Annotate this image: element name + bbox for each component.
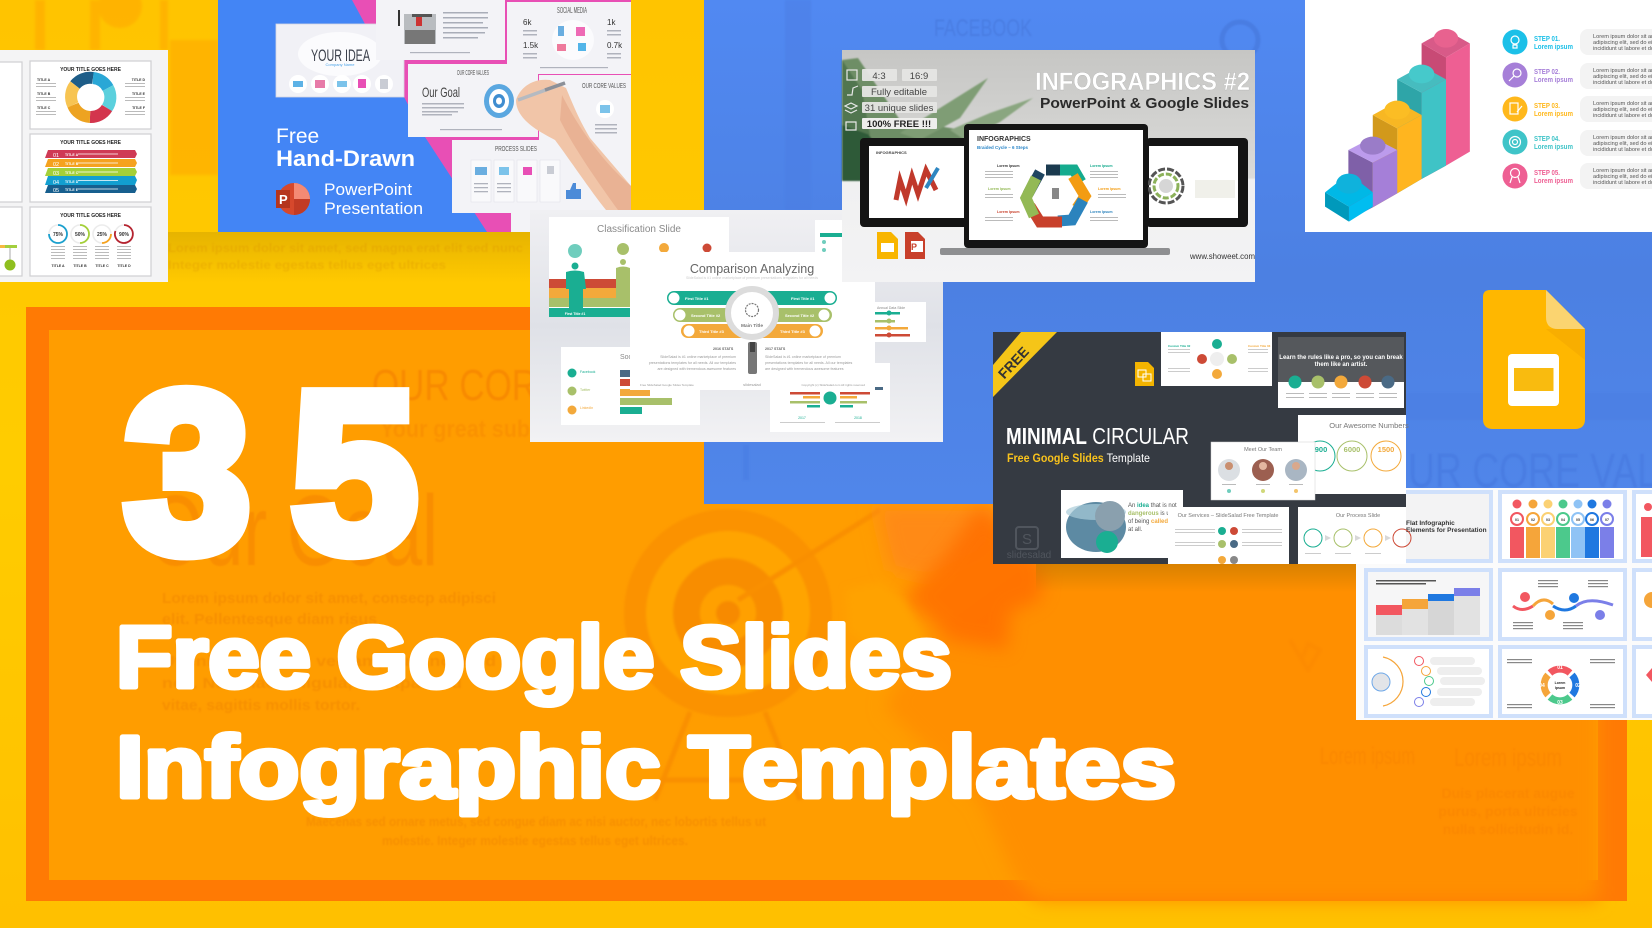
slide: seven columns: 06 [1590,518,1594,522]
faded background text on orange [148,361,1578,848]
slide: classification: First Title #1 [565,312,585,316]
panel background [842,50,1255,282]
card: stacked ribbons: 02 [53,162,59,168]
slide: four segment ring [1498,645,1627,718]
card: stacked ribbons: TITLE E [65,188,79,192]
slide: right chart: 2018 [854,416,862,420]
slide: your idea [276,24,404,97]
slide: top right small [815,220,842,252]
chart: isometric lego bars [1325,29,1470,222]
faded lorem text on yellow band: Integer molestie egestas tellus eget ultrices [168,258,446,272]
slide: process slides [452,140,631,213]
step labels: STEP 02. [1534,67,1560,76]
card: percentage rings: 75% [53,232,64,238]
left column partial cards [0,62,22,276]
slide: social media: SOCIAL MEDIA [557,6,587,15]
laptop: Lorem Ipsum [1098,187,1121,191]
slide: circle diagram: Custom Title 03 [1248,344,1271,348]
step descriptions [1580,29,1652,189]
slide: your idea: YOUR IDEA [311,46,370,65]
slide: stair blocks [1364,568,1493,641]
slide: idea with circles: of being called an i [1128,519,1179,525]
card: percentage rings: TITLE D [117,264,131,268]
faded lorem text on yellow band [168,241,523,272]
hand shapes [875,505,1000,580]
slide: core values right [539,75,631,150]
slide: social media: 0.7k [607,41,623,50]
ribbon: free [993,332,1057,397]
icon: google slides small [877,232,898,259]
slide: our goal: Our Goal [422,84,460,100]
panel background [993,332,1406,564]
card: circular arrows: YOUR TITLE GOES HERE [60,67,122,73]
ribbon: free: FREE [995,343,1032,382]
heading: free hand-drawn: Hand-Drawn [276,146,415,171]
faded background text on orange: Your great sub [380,416,530,443]
card: stacked ribbons: TITLE C [65,171,79,175]
slide: awesome numbers: 6000 [1344,445,1360,454]
slide: idea with circles [1061,490,1183,558]
step labels: STEP 04. [1534,134,1560,143]
card: percentage rings: 90% [119,232,130,238]
comparison stats text: presentations templates for all needs. All our templates [649,361,736,365]
slide: title: Elements for Presentation [1406,527,1487,534]
slide: partial right multicolor [1632,568,1652,641]
background: blue block [704,0,1652,504]
faded background text on orange: Lorem ipsum dolor sit amet, consecp adipisci [162,590,496,607]
step labels: Lorem ipsum [1534,109,1573,118]
faded background text on orange: OUR COR [372,361,537,410]
slide: social media bars: Twitter [580,388,591,392]
panel background [0,50,168,282]
comparison pills: First Title #1 [791,296,815,301]
slide: seven columns: 04 [1561,518,1565,522]
slide: classification: Classification Slide [597,224,681,235]
slide: our services: Our Services – SlideSalad Free Template [1178,513,1278,519]
number: 35: 3 [124,346,251,600]
card: stacked ribbons: 05 [53,188,59,194]
card: stacked ribbons: TITLE B [65,162,79,166]
icon: powerpoint small: P [911,242,917,252]
laptop: Lorem Ipsum [1090,164,1113,168]
icon: powerpoint small [905,232,925,259]
step labels: Lorem ipsum [1534,42,1573,51]
heading: free hand-drawn [276,125,415,171]
slide: social media: 1.5k [523,41,539,50]
laptop: Lorem Ipsum [988,187,1011,191]
slide: title: Flat Infographic [1406,520,1455,527]
card: circular arrows: TITLE F [132,106,146,110]
slide: right chart: 2017 [798,416,806,420]
slide: circle diagram [1161,332,1272,386]
slide: our process [1298,507,1411,564]
laptop: Lorem Ipsum [1090,210,1113,214]
heading: minimal circular: MINIMAL CIRCULAR [1006,423,1189,449]
panel background blue [218,0,631,232]
panel background [1356,488,1652,720]
slide: our goal [408,64,538,137]
slide: classification [549,217,729,317]
slide: our services [1168,507,1289,564]
faded background text on orange: nec. Nulla lacus ligula, volutpat sed [162,675,462,692]
comparison pills: Third Title #3 [699,329,725,334]
slide: four segment ring: Ipsum [1555,686,1565,690]
slide: idea with circles: An idea that is not [1128,503,1177,509]
comparison stats text: are designed with tremendous awesome features [657,367,736,371]
card: percentage rings: 25% [97,232,108,238]
tablet: left [860,138,968,227]
slide: our process: Our Process Slide [1336,513,1380,519]
title: free google slides infographic templates: Free Google Slides [116,609,952,706]
faded background illustration: target and hand [624,505,1628,901]
icon: Google Slides large [1483,290,1585,429]
faded background text on orange: vitae, sagittis mollis tortor. [162,697,360,714]
faded background text on orange: Maecenas sed ornare metus, sed congue diam ac nisi auctor, nec lobortis tellus ut [306,814,767,829]
card: percentage rings: TITLE B [73,264,87,268]
slide: comparison main card: SlideSalad is #1 online marketplace of premium presentations templates for all needs [686,276,818,280]
slide: awesome numbers: Our Awesome Numbers [1329,421,1409,430]
laptop [940,124,1170,255]
laptop: Braided Cycle – 6 Steps [977,145,1029,150]
card: stacked ribbons: YOUR TITLE GOES HERE [60,140,122,146]
tags: 100% FREE !!! [867,119,931,130]
slide: annual data [875,302,926,342]
faded background text on orange: Lorem ipsum [1320,743,1415,770]
logo: slidesalad: slidesalad [1007,550,1051,561]
icon: PowerPoint: P [279,192,288,207]
slide: quote with icons: Learn the rules like a pro, so you can break [1279,355,1403,361]
panel: infographics 2 template [842,50,1255,282]
step labels: STEP 03. [1534,101,1560,110]
slide: four segment ring: 04 [1539,683,1545,689]
shadow under minimal circular panel [1036,564,1628,592]
slide: idea with circles: dangerous is unwo [1128,511,1181,517]
comparison pills: Third Title #3 [780,329,806,334]
step labels: STEP 01. [1534,34,1560,43]
panel: hand-drawn PowerPoint template [218,0,631,232]
card: stacked ribbons: 04 [53,180,59,186]
background: faded top-left illustration [35,0,218,175]
tablet: right [1146,138,1248,227]
heading: free hand-drawn: Free [276,125,319,148]
faded background text on orange: molestie. Integer molestie egestas tellus eget ultrices. [382,833,688,848]
tags [845,69,937,130]
slide: seven columns: 01 [1515,518,1519,522]
logo: slidesalad: S [1022,531,1032,548]
card: percentage rings: TITLE A [51,264,65,268]
tags: 31 unique slides [865,103,934,114]
shadow band under hand-drawn panel [150,232,540,282]
slide: social media: 6k [523,18,532,27]
slide: social media bars [561,347,700,425]
slide: quote with icons [1278,337,1404,408]
card: circular arrows: TITLE A [37,78,51,82]
slide: seven columns: 02 [1531,518,1535,522]
comparison pills: Second Title #2 [785,313,815,318]
slide: meet our team: Meet Our Team [1244,447,1282,453]
comparison stats text: 2016 STATS [713,347,734,351]
comparison stats text: SlideSalad is #1 online marketplace of premium [765,355,841,359]
subheading: powerpoint and google slides: PowerPoint & Google Slides [1040,95,1249,112]
card: percentage rings: TITLE C [95,264,109,268]
partial card details [0,245,17,270]
faded background text on orange: purus, porta ultricies [1438,803,1578,819]
slide: awesome numbers: 1500 [1378,445,1394,454]
step icons [1502,30,1528,188]
background: orange frame [26,307,1627,901]
target rings [624,509,880,800]
card: percentage rings [30,207,151,276]
comparison stats text: Free SlideSalad Google Slides Template [640,383,694,387]
slide: right chart [770,363,890,432]
slide: social media [507,2,631,74]
card: stacked ribbons: TITLE D [65,180,79,184]
comparison stats text [640,347,865,387]
text: PowerPoint Presentation: Presentation [324,199,423,218]
slide: photo [376,0,505,60]
slide: idea with circles: at all. [1128,527,1143,533]
slide: quote with icons: them like an artist. [1315,362,1368,368]
slide: four segment ring: Lorem [1555,681,1565,685]
step labels: STEP 05. [1534,168,1560,177]
slide: awesome numbers [1298,415,1409,494]
card: circular arrows: TITLE E [132,92,146,96]
card: circular arrows [30,61,151,129]
panel: comparison analyzing template [530,210,943,442]
slide: core values right: OUR CORE VALUES [582,83,626,90]
comparison stats text: 2017 STATS [765,347,786,351]
card: stacked ribbons: 03 [53,171,59,177]
tablet: left: INFOGRAPHICS [876,150,907,155]
faded lorem text on yellow band: Lorem ipsum dolor sit amet, sed magna erat elit sed nunc [168,241,523,255]
slide: wave [1498,568,1627,641]
tags: 16:9 [910,71,928,82]
slide: process slides: PROCESS SLIDES [495,146,537,153]
illustration: hand holding pen [516,80,631,210]
card: percentage rings: YOUR TITLE GOES HERE [60,213,122,219]
large arm shape [884,560,1598,901]
slide: seven columns: 07 [1605,518,1609,522]
slide: meet our team [1211,442,1315,500]
slide: your idea: Company Name [326,62,355,67]
heading: infographics 2: INFOGRAPHICS #2 [1035,68,1250,96]
faded background text on orange: nulla sollicitudin id. [1443,821,1573,837]
card: circular arrows: TITLE D [132,78,145,82]
laptop: INFOGRAPHICS [977,136,1031,143]
slide: comparison main card [630,252,875,390]
faded background text on blue [743,0,1652,498]
slide: social media bars: Social Media [620,354,660,361]
slide: title [1364,490,1493,563]
slide: four segment ring: 01 [1557,665,1563,671]
card: circular arrows: TITLE B [37,92,51,96]
subheading: free google slides template: Free Google Slides Template [1007,451,1150,465]
tags: 4:3 [872,71,886,82]
slide: globe timeline [1364,645,1493,718]
step labels: Lorem ipsum [1534,176,1573,185]
faded background text on blue: FACEBOOK [934,15,1032,42]
title: free google slides infographic templates [116,609,1176,816]
panel: flat infographic slide grid [1356,488,1652,720]
number: 35: 5 [291,346,418,600]
heading: comparison analyzing: Comparison Analyzing [690,262,814,276]
icon: slides small [1135,362,1154,386]
icon: PowerPoint [276,183,310,215]
slide: our goal: OUR CORE VALUES [457,70,489,77]
comparison stats text: are designed with tremendous awesome features [765,367,844,371]
slide: social media bars: Facebook [580,370,596,374]
panel background [1305,0,1652,232]
number: 35 [124,346,418,600]
comparison stats text: presentations templates for all needs. All our templates [765,361,852,365]
slide: annual data: Annual Data Slide [877,306,905,310]
panel: lego steps template [1305,0,1652,232]
faded background text on orange: Duis placerat augue [1441,785,1575,801]
magnifier: Main Title [741,323,763,329]
card: stacked ribbons [30,134,151,202]
slide: partial right red [1632,490,1652,563]
tags: Fully editable [871,87,927,98]
photo: plant leaves [842,58,1033,181]
title: free google slides infographic templates: Infographic Templates [116,719,1176,816]
panel: white slide grid left [0,50,168,282]
laptop: Lorem Ipsum [997,210,1020,214]
comparison pills [667,291,837,338]
step labels: Lorem ipsum [1534,142,1573,151]
slide: seven columns: 05 [1576,518,1580,522]
slide: four segment ring: 02 [1575,683,1581,689]
magnifier [728,289,776,374]
text: PowerPoint Presentation: PowerPoint [324,180,412,199]
step labels [1534,34,1573,185]
faded background text on orange: elit. Pellentesque diam risus [162,611,377,628]
card: circular arrows: TITLE C [37,106,51,110]
comparison pills: First Title #1 [685,296,709,301]
pink backdrop shape [352,0,631,232]
logo: slidesalad [1007,527,1051,561]
comparison stats text: slidesalad [743,382,761,387]
panel: minimal circular template [993,332,1411,564]
comparison stats text: SlideSalad is #1 online marketplace of premium [660,355,736,359]
faded background text on orange: Ut enim ad minim veniam, quis nostrud [162,653,496,670]
slide: seven columns [1498,490,1627,563]
comparison stats text: Copyright (c) SlideSalad.com All rights reserved [801,383,865,387]
faded background text on orange: Lorem ipsum [1454,744,1562,772]
slide: social media: 1k [607,18,616,27]
step labels: Lorem ipsum [1534,75,1573,84]
laptop: Lorem Ipsum [997,164,1020,168]
card: percentage rings: 50% [75,232,86,238]
hexagonal ring [1026,170,1085,222]
slide: social media bars: LinkedIn [580,406,593,410]
text: PowerPoint Presentation [324,180,423,218]
slide: awesome numbers: 900 [1315,445,1327,454]
card: stacked ribbons: 01 [53,153,59,159]
card: stacked ribbons: TITLE A [65,153,79,157]
faded background text on orange: Our Goal [148,475,438,587]
background: orange inner panel [49,330,1598,880]
slide: partial right red diamond [1632,645,1652,718]
slide: seven columns: 03 [1546,518,1550,522]
slide: circle diagram: Custom Title 02 [1168,344,1191,348]
white lower slide strip [511,213,631,232]
slide: four segment ring: 03 [1557,700,1563,706]
comparison pills: Second Title #2 [691,313,721,318]
panel background [530,210,943,442]
url text: www.showeet.com [1189,252,1255,261]
